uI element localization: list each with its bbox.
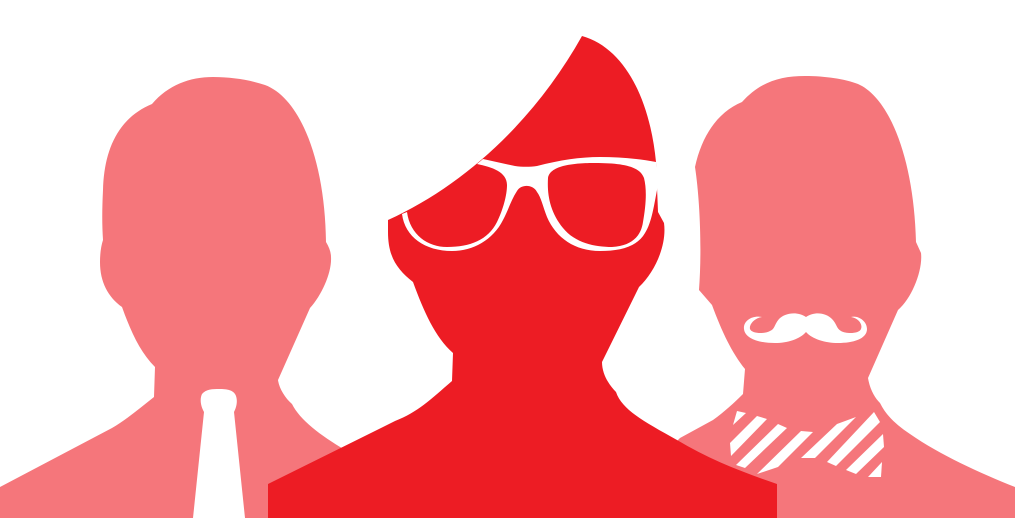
moustache — [744, 313, 867, 343]
bow tie stripes — [730, 411, 884, 477]
left silhouette — [0, 77, 400, 518]
white glasses — [402, 157, 658, 251]
right person with moustache and bow tie — [600, 76, 1015, 518]
centre person with glasses — [268, 36, 777, 518]
right silhouette — [600, 76, 1015, 518]
white tie — [193, 389, 245, 518]
left person with tie — [0, 77, 400, 518]
centre silhouette — [268, 36, 777, 518]
